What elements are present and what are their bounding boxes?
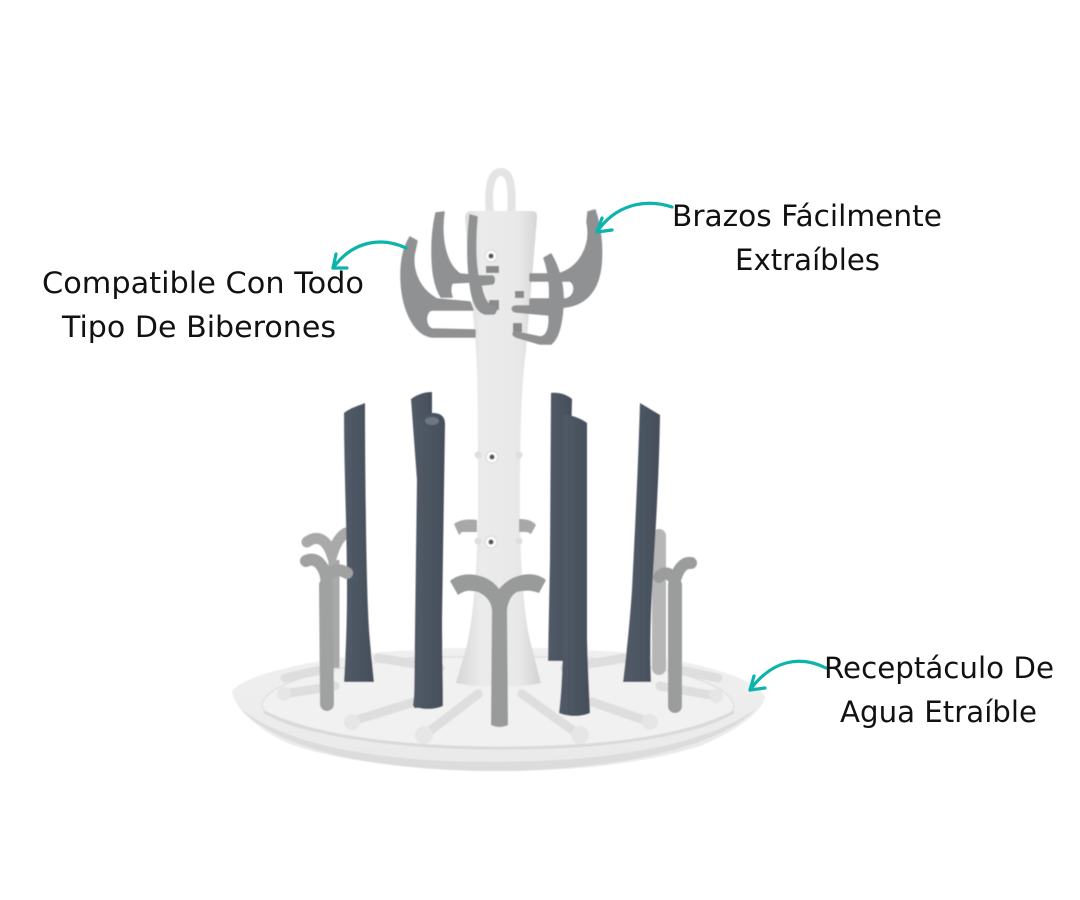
arrow: to tray (750, 661, 826, 690)
callout: removable arms (597, 199, 951, 277)
callout: water tray (750, 651, 1063, 729)
back grey pegs (307, 533, 659, 668)
label: compatible: Compatible Con Todo (42, 266, 364, 300)
label: water tray: Agua Etraíble (840, 695, 1037, 729)
peg: front centre (450, 574, 546, 727)
grey removable arms (401, 210, 602, 344)
peg: front right (659, 563, 691, 706)
hole centres and slots (486, 254, 524, 544)
top handle (489, 172, 512, 214)
arrow: to right arm (597, 203, 672, 232)
arm: front left (401, 237, 475, 337)
arm: front centre (468, 215, 496, 314)
arm: front right (512, 254, 563, 344)
label: removable arms: Extraíbles (735, 243, 880, 277)
small hooks on the column (454, 519, 536, 535)
column side bumps (474, 452, 522, 544)
peg opening (425, 417, 439, 425)
arm: back right (530, 210, 602, 307)
product: bottle drying rack (232, 172, 765, 771)
front dark pegs (344, 403, 660, 716)
peg: front left (306, 560, 347, 704)
column holes (485, 250, 498, 548)
back dark pegs (411, 392, 572, 708)
central column (456, 172, 541, 687)
arm: back left (432, 212, 470, 297)
column body (456, 211, 541, 687)
arrow: to left arm (333, 242, 406, 268)
callout: compatible (42, 242, 406, 344)
front grey Y pegs (306, 560, 691, 727)
label: water tray: Receptáculo De (824, 651, 1054, 685)
label: compatible: Tipo De Biberones (61, 310, 336, 344)
label: removable arms: Brazos Fácilmente (672, 199, 942, 233)
water tray (232, 648, 765, 771)
